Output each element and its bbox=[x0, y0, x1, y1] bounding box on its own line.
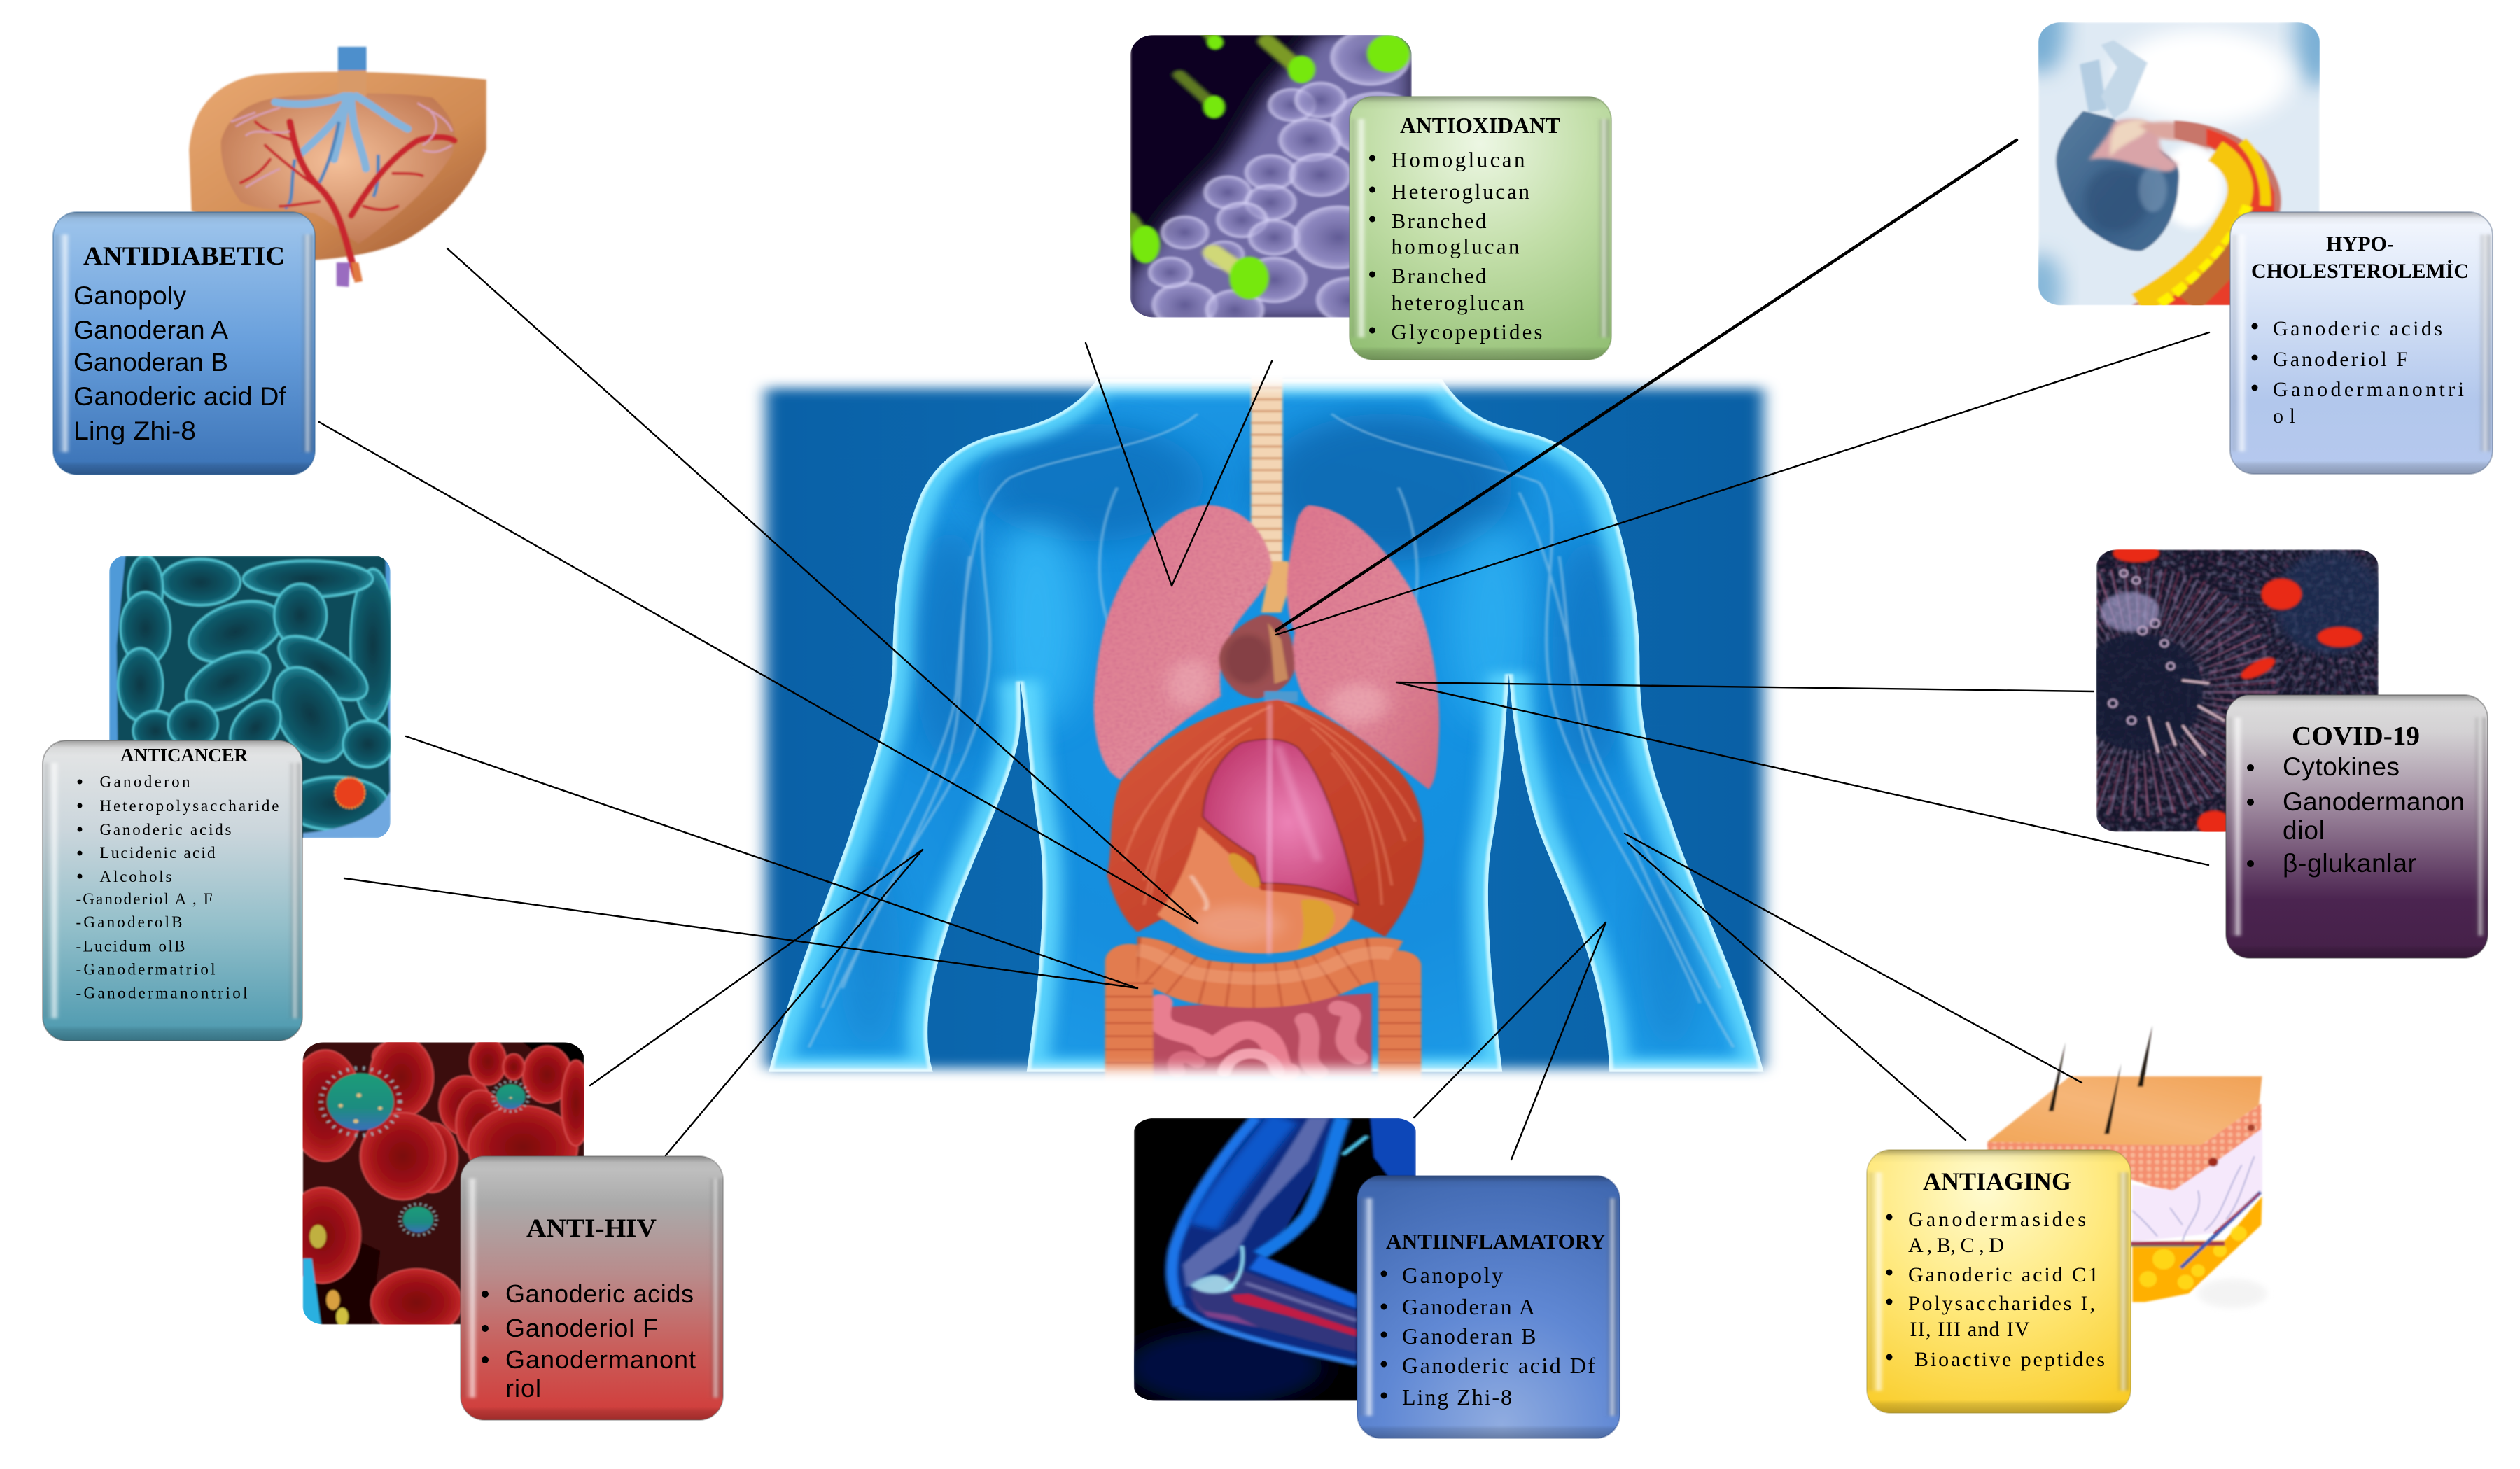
compound list: diol bbox=[2283, 816, 2325, 845]
compound list: Alcohols bbox=[99, 868, 172, 885]
compound list: Ganoderan A bbox=[1402, 1294, 1535, 1319]
compound list: Heteropolysaccharide bbox=[99, 797, 279, 815]
compound list: II, III and IV bbox=[1910, 1318, 2030, 1341]
compound list: Homoglucan bbox=[1392, 148, 1525, 172]
connector: heart image to heart, thick bbox=[1276, 140, 2017, 631]
image: coronavirus bbox=[2033, 532, 2412, 836]
compound list: Ganodermanontri bbox=[2273, 378, 2464, 401]
internal organs bbox=[1093, 374, 1439, 1087]
image: cells with green particles bbox=[1128, 30, 1435, 330]
image: skin cross-section bbox=[1987, 1025, 2267, 1308]
title: ANTIINFLAMATORY bbox=[1386, 1229, 1606, 1253]
compound list: Ling Zhi-8 bbox=[74, 416, 196, 445]
compound list: Bioactive peptides bbox=[1914, 1348, 2105, 1371]
compound list: Ganoderic acids bbox=[505, 1279, 694, 1308]
label box: antiaging bbox=[1867, 1150, 2131, 1413]
compound list bbox=[2247, 752, 2465, 878]
title: ANTIDIABETIC bbox=[83, 242, 285, 271]
compound list: Branched bbox=[1392, 264, 1487, 288]
title: ANTIAGING bbox=[1923, 1167, 2071, 1195]
compound list: Heteroglucan bbox=[1392, 179, 1530, 204]
compound list: Ganoderic acid C1 bbox=[1908, 1263, 2099, 1286]
connector: intestine image to colon bbox=[406, 736, 1138, 988]
connector: anticancer box to colon bbox=[344, 878, 1138, 988]
compound list: A , B, C , D bbox=[1908, 1234, 2004, 1257]
compound list: Branched bbox=[1392, 209, 1487, 233]
colon bbox=[1129, 950, 1400, 1087]
title: ANTICANCER bbox=[120, 745, 248, 766]
connector lines bbox=[319, 140, 2209, 1160]
compound list: homoglucan bbox=[1392, 234, 1520, 259]
title: HYPO- bbox=[2326, 232, 2394, 255]
compound list: -Ganoderiol A , F bbox=[76, 890, 213, 908]
diaphragm and liver bbox=[1107, 700, 1424, 937]
blue background bbox=[742, 370, 1793, 1087]
image: liver bbox=[189, 47, 486, 287]
compound list: Ganopoly bbox=[74, 281, 187, 310]
compound list: Ganoderan B bbox=[74, 348, 228, 377]
panel: hypocholesterolemic bbox=[2015, 0, 2493, 474]
panel: antiinflammatory bbox=[1127, 1118, 1620, 1438]
compound list: Ganoderiol F bbox=[2273, 348, 2408, 371]
heart bbox=[1219, 615, 1298, 702]
compound list: Polysaccharides I, bbox=[1908, 1292, 2095, 1315]
compound list bbox=[74, 281, 287, 445]
compound list: Ganoderan A bbox=[74, 316, 228, 344]
compound list: Ganoderic acid Df bbox=[74, 382, 287, 411]
connector: elbow image to arm bbox=[1414, 922, 1606, 1118]
compound list bbox=[2251, 317, 2464, 428]
panel: antioxidant bbox=[1128, 30, 1611, 360]
label box: anti-HIV bbox=[461, 1156, 723, 1420]
connector: COVID-19 box to lung bbox=[1396, 682, 2208, 865]
compound list: riol bbox=[505, 1374, 541, 1403]
translucent body silhouette bbox=[769, 379, 1763, 1072]
compound list: β-glukanlar bbox=[2283, 849, 2416, 878]
label box: antioxidant bbox=[1350, 97, 1611, 360]
compound list: Ganoderan B bbox=[1402, 1323, 1536, 1349]
connector: antioxidant box to lung bbox=[1172, 361, 1272, 586]
compound list bbox=[1886, 1208, 2105, 1371]
compound list bbox=[1380, 1263, 1595, 1410]
compound list: Ganoderon bbox=[99, 773, 190, 791]
connector: hypocholesterolemic box to heart bbox=[1276, 332, 2209, 635]
compound list: -Ganodermatriol bbox=[76, 960, 216, 978]
compound list: heteroglucan bbox=[1392, 290, 1525, 315]
panel: anticancer bbox=[43, 556, 396, 1041]
small intestine bbox=[1151, 993, 1372, 1077]
image: glowing elbow joint bbox=[1127, 1118, 1416, 1405]
compound list: Ganoderic acid Df bbox=[1402, 1353, 1595, 1378]
compound list: Ganoderiol F bbox=[505, 1314, 658, 1342]
connector: antiaging box to arm bbox=[1628, 843, 1966, 1140]
compound list: Ganoderic acids bbox=[2273, 317, 2442, 340]
panel: antiaging bbox=[1867, 1025, 2267, 1413]
compound list: Ganodermanont bbox=[505, 1345, 696, 1374]
panel: antidiabetic bbox=[53, 47, 486, 475]
panel: COVID-19 bbox=[2033, 532, 2488, 958]
title: CHOLESTEROLEMİC bbox=[2251, 260, 2469, 283]
compound list: -Lucidum olB bbox=[76, 938, 185, 955]
label box: COVID-19 bbox=[2226, 695, 2488, 958]
connector: antiinflammatory box to arm bbox=[1511, 922, 1606, 1160]
lungs bbox=[1093, 505, 1439, 789]
image: heart and clogged artery bbox=[2015, 0, 2339, 325]
compound list bbox=[1369, 148, 1543, 344]
connector: skin image to arm bbox=[1625, 834, 2082, 1083]
trachea bbox=[1251, 374, 1292, 612]
connector: antidiabetic box to stomach bbox=[319, 422, 1198, 923]
label box: anticancer bbox=[43, 740, 302, 1041]
compound list: ol bbox=[2273, 405, 2295, 428]
compound list: Cytokines bbox=[2283, 752, 2400, 781]
stomach bbox=[1157, 703, 1358, 954]
connector: liver image to stomach bbox=[447, 248, 1198, 923]
compound list: Ganodermanon bbox=[2283, 787, 2465, 816]
connector: anti-HIV box to arm bbox=[666, 850, 923, 1155]
label box: antidiabetic bbox=[53, 212, 315, 475]
label box: antiinflammatory bbox=[1357, 1176, 1620, 1438]
title: COVID-19 bbox=[2292, 722, 2420, 751]
compound list: Ganodermasides bbox=[1908, 1208, 2086, 1231]
title: ANTIOXIDANT bbox=[1400, 113, 1560, 138]
compound list: -Ganodermanontriol bbox=[76, 984, 248, 1002]
compound list bbox=[76, 773, 279, 1002]
compound list: Lucidenic acid bbox=[99, 844, 216, 862]
compound list: Ganoderic acids bbox=[99, 821, 232, 838]
connector: coronavirus image to lung bbox=[1396, 682, 2094, 691]
compound list: Ganopoly bbox=[1402, 1263, 1503, 1288]
compound list: Glycopeptides bbox=[1392, 320, 1543, 344]
connector: blood image to arm bbox=[590, 850, 923, 1085]
central illustration: human torso with internal organs bbox=[742, 370, 1793, 1087]
compound list: -GanoderolB bbox=[76, 913, 182, 931]
image: red blood cells and virus bbox=[285, 1037, 591, 1336]
image: intestine with tumour bbox=[109, 556, 396, 838]
title: ANTI-HIV bbox=[526, 1214, 657, 1243]
panel: anti-HIV bbox=[285, 1037, 723, 1420]
title bbox=[2251, 232, 2469, 283]
compound list: Ling Zhi-8 bbox=[1402, 1384, 1512, 1410]
label box: hypocholesterolemic bbox=[2230, 212, 2493, 474]
connector: antioxidant image to lung bbox=[1086, 343, 1172, 586]
compound list bbox=[482, 1279, 696, 1403]
